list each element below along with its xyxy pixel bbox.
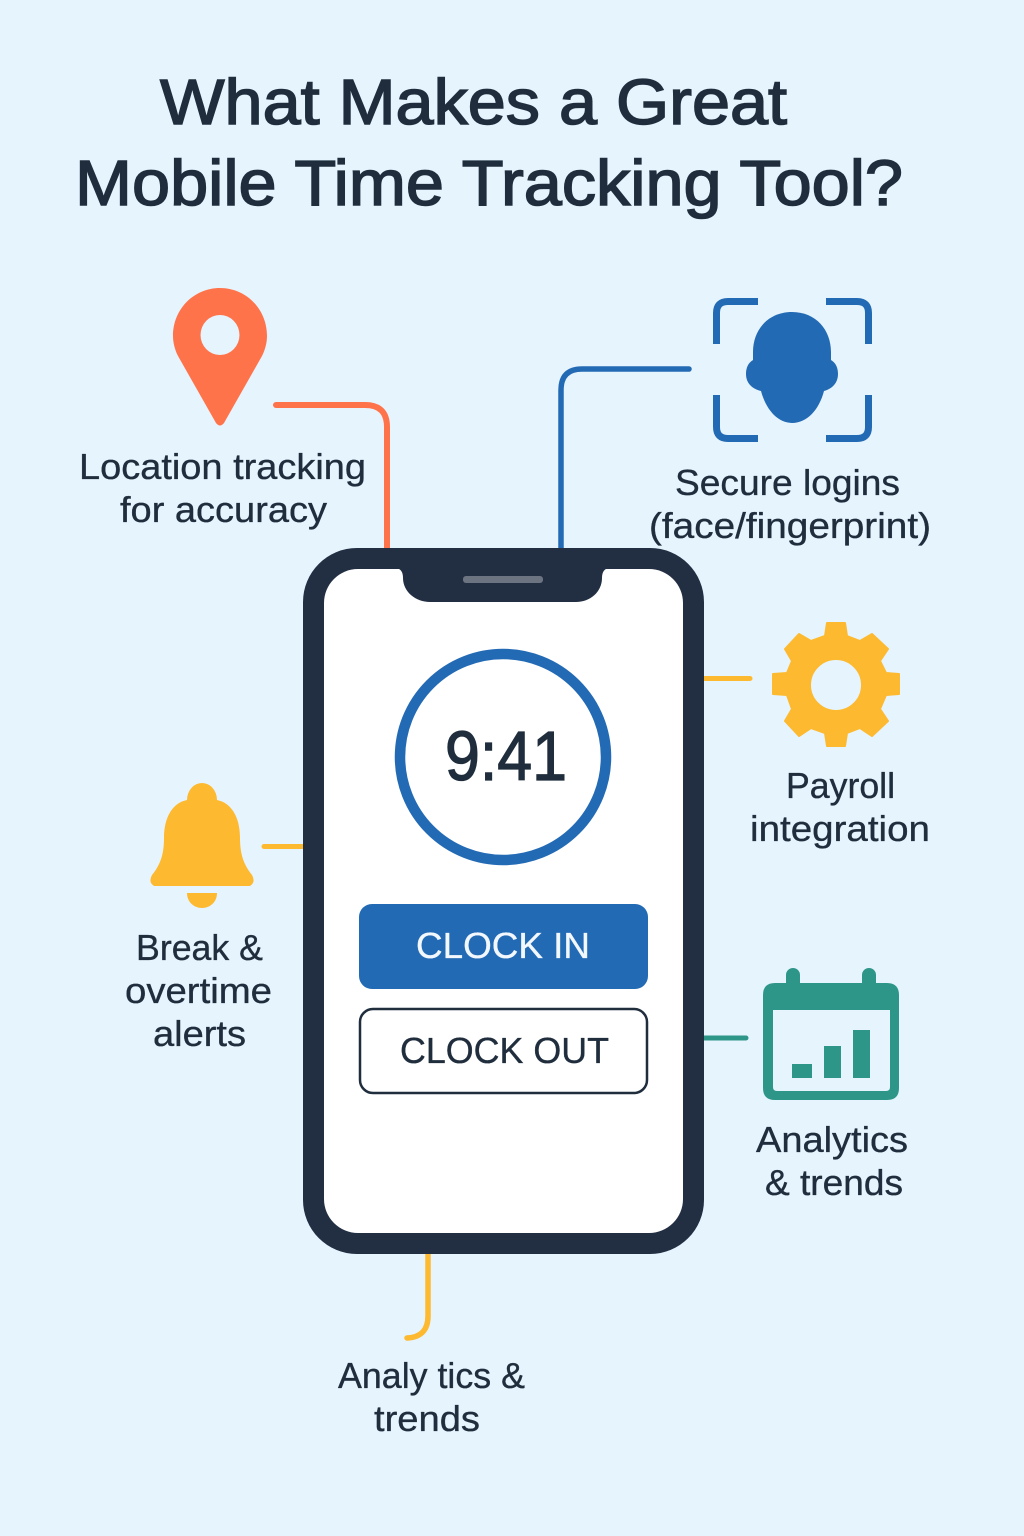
connector: secure logins to phone: [561, 369, 689, 550]
connector: location to phone: [276, 405, 387, 550]
clock ring: [400, 654, 606, 860]
face scan brackets: [716, 302, 868, 438]
connector: payroll to phone: [700, 676, 750, 681]
label: location tracking: for accuracy: [120, 489, 327, 530]
clock time: 9:41: [445, 717, 567, 795]
label: location tracking: [79, 446, 366, 530]
label: secure logins: [649, 462, 931, 546]
phone body: [303, 548, 704, 1254]
label: location tracking: Location tracking: [79, 446, 366, 487]
label: payroll integration: Payroll: [786, 765, 895, 806]
title: Mobile Time Tracking Tool?: [75, 147, 903, 219]
phone screen: [324, 569, 683, 1233]
label: payroll integration: integration: [750, 808, 930, 849]
label: break and overtime alerts: [125, 927, 272, 1054]
icon: bell: [150, 783, 254, 908]
label: bottom analytics and trends: Analy tics &: [338, 1355, 525, 1396]
connector: analytics to phone: [700, 1036, 746, 1040]
calendar bars: [792, 1030, 870, 1078]
label: secure logins: (face/fingerprint): [649, 505, 931, 546]
icon: gear: [773, 623, 899, 746]
clock in button: [359, 904, 648, 989]
label: analytics and trends: Analytics: [756, 1119, 908, 1160]
label: analytics and trends: [756, 1119, 908, 1203]
phone: [303, 548, 704, 1254]
connector: bottom analytics to phone: [407, 1250, 428, 1338]
connector: alerts to phone: [264, 844, 306, 849]
label: bottom analytics and trends: [338, 1355, 525, 1439]
bell clapper: [187, 893, 217, 908]
phone notch: [396, 568, 609, 602]
bell body: [150, 783, 254, 886]
label: payroll integration: [750, 765, 930, 849]
label: bottom analytics and trends: trends: [374, 1398, 480, 1439]
face silhouette: [746, 312, 838, 423]
icon: analytics calendar: [763, 975, 899, 1100]
icon: location pin: [173, 288, 267, 426]
clock in button: CLOCK IN: [416, 925, 590, 966]
calendar rings: [793, 975, 869, 990]
label: break and overtime alerts: Break &: [136, 927, 263, 968]
label: break and overtime alerts: alerts: [153, 1013, 246, 1054]
phone speaker: [463, 576, 543, 583]
title: What Makes a Great: [160, 66, 787, 138]
calendar frame: [763, 983, 899, 1100]
clock out button: [360, 1009, 647, 1093]
clock out button: CLOCK OUT: [400, 1030, 609, 1071]
icon: face scan: [716, 302, 868, 438]
label: secure logins: Secure logins: [675, 462, 900, 503]
title: [75, 66, 903, 219]
label: analytics and trends: & trends: [765, 1162, 903, 1203]
label: break and overtime alerts: overtime: [125, 970, 272, 1011]
